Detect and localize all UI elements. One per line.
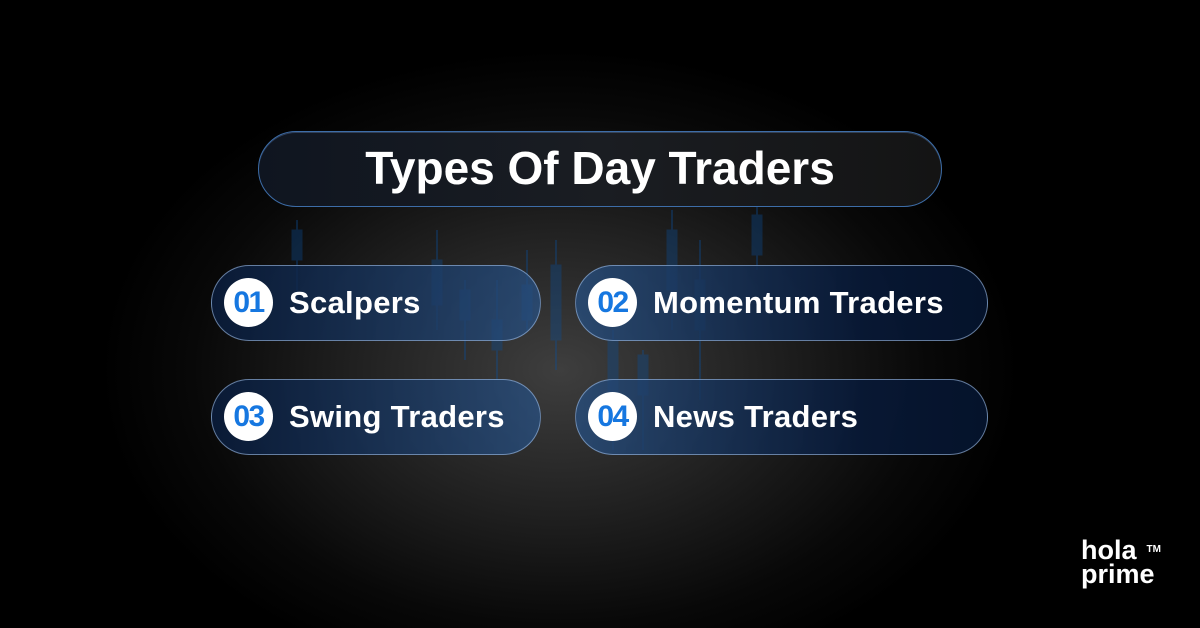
item 04: News Traders: News Traders	[653, 399, 858, 434]
item 03: Swing Traders	[211, 379, 541, 455]
logo: hola prime: prime	[1081, 559, 1155, 589]
title: Types Of Day Traders	[365, 142, 835, 194]
item 03: Swing Traders: 03	[233, 400, 264, 433]
item 01: Scalpers: 01	[233, 286, 264, 319]
item 04: News Traders	[575, 379, 988, 455]
item 01: Scalpers: Scalpers	[289, 285, 421, 320]
item 04: News Traders: 04	[597, 400, 628, 433]
item 02: Momentum Traders	[575, 265, 988, 341]
title	[258, 131, 942, 207]
item 02: Momentum Traders: Momentum Traders	[653, 285, 944, 320]
item 01: Scalpers	[211, 265, 541, 341]
logo: hola prime: hola TM	[1081, 535, 1161, 565]
item 02: Momentum Traders: 02	[597, 286, 628, 319]
logo: hola prime	[1081, 535, 1161, 589]
item 03: Swing Traders: Swing Traders	[289, 399, 505, 434]
